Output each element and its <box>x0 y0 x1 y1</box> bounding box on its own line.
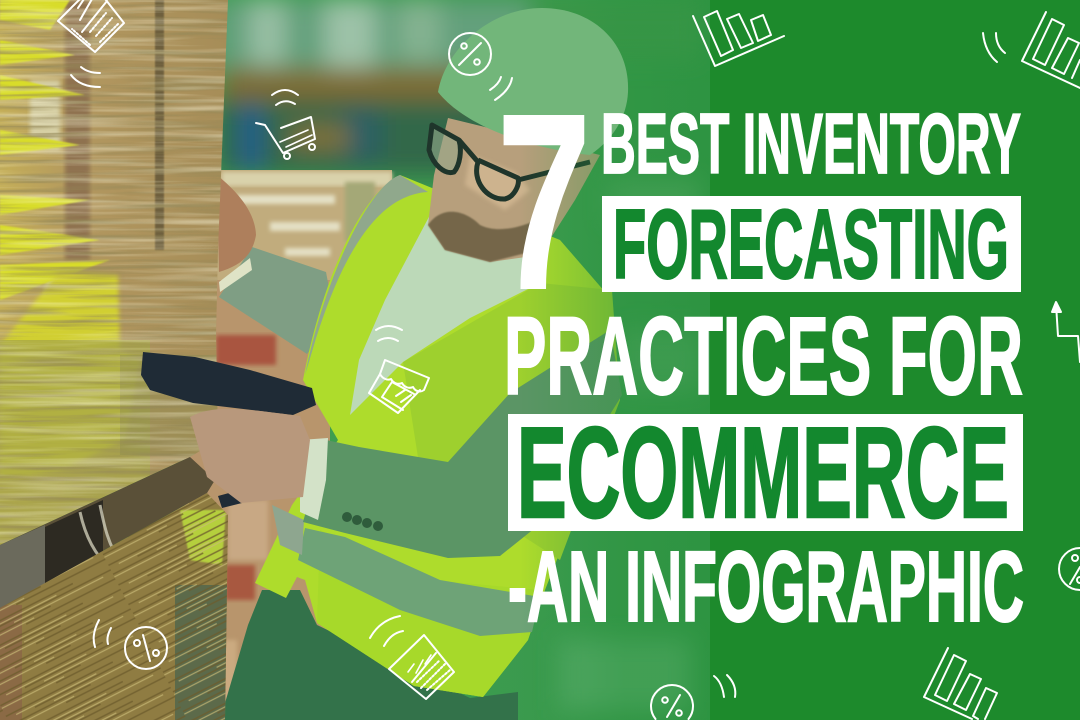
worker: glasses <box>429 125 590 199</box>
icon: growth arrow <box>1052 302 1080 362</box>
background: stacked cartons behind worker <box>185 170 392 720</box>
worker: vest <box>255 175 620 697</box>
tint over worker right side <box>534 20 700 716</box>
left pallet: upper wrapped cartons <box>0 0 230 550</box>
icon: storefront <box>369 326 429 413</box>
icon: laptop on vest <box>370 616 454 699</box>
barcode scanner <box>141 352 316 508</box>
icon: percent badge bottom left <box>94 620 167 669</box>
icon: percent badge on hat <box>449 33 512 100</box>
worker: shirt <box>350 213 540 415</box>
worker: pants <box>220 590 518 720</box>
icon: bar chart top centre <box>693 11 784 66</box>
icon: shopping cart <box>256 90 315 159</box>
title: numeral 7: 7 <box>497 62 591 341</box>
icon: bar chart bottom right <box>924 648 997 719</box>
left pallet: lower cartons <box>0 490 230 720</box>
icon: percent badge bottom centre <box>651 675 735 719</box>
worker: raised arm and hand <box>217 175 335 354</box>
right solid green panel <box>710 188 712 375</box>
icon: bar chart top right <box>983 12 1080 88</box>
worker: face <box>428 118 600 262</box>
background: blurred warehouse <box>221 0 710 720</box>
title <box>504 112 1024 623</box>
left pallet: gap between cartons <box>0 457 215 608</box>
icon: percent badge right edge <box>1059 548 1080 590</box>
worker: sleeve and reflective stripes <box>272 330 622 636</box>
worker: scanner hand <box>190 409 310 503</box>
worker: hard hat <box>438 8 628 155</box>
icon: laptop top left <box>58 0 124 87</box>
